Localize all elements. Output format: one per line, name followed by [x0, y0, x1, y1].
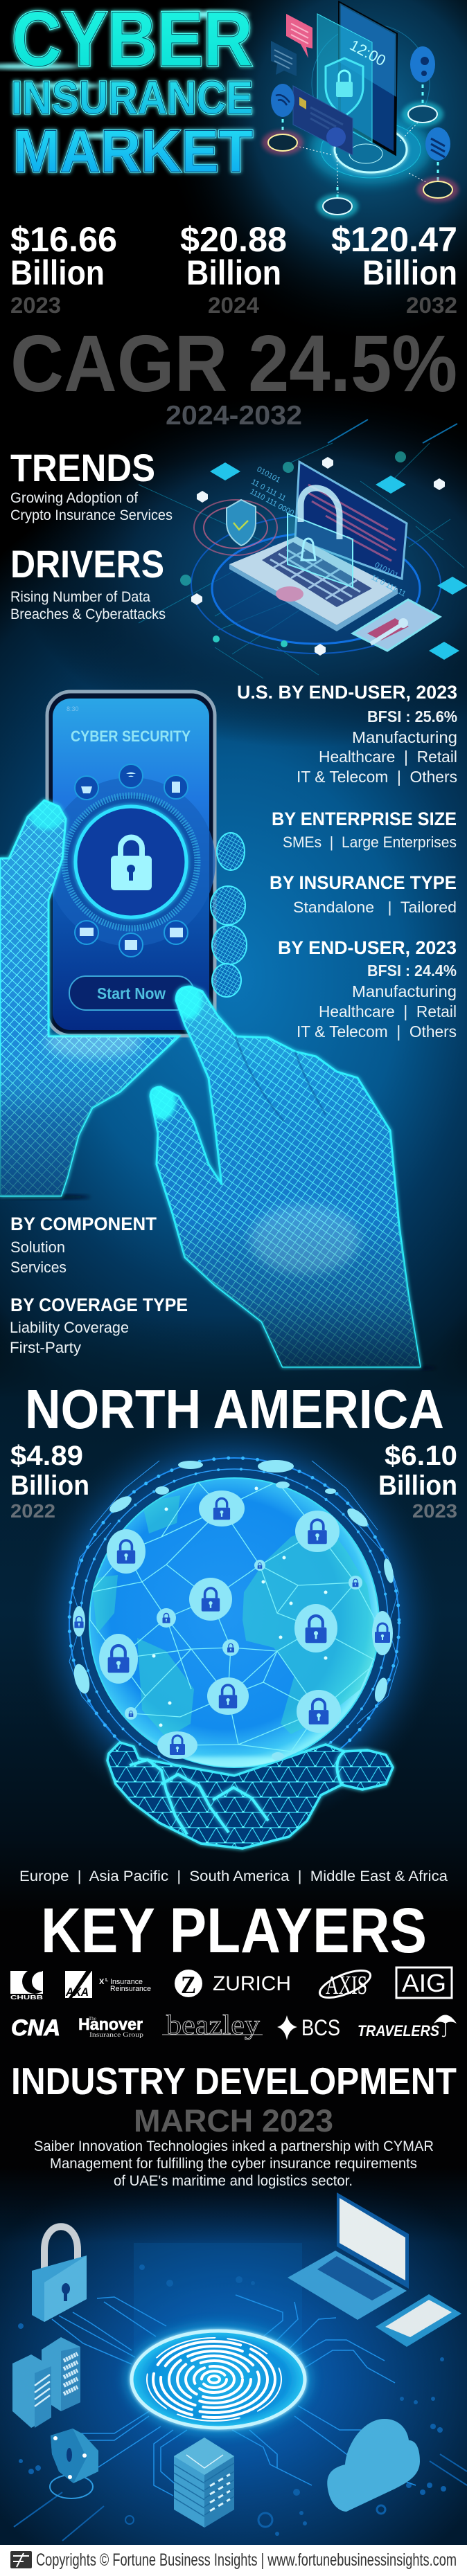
stat: 2024: 2024 [208, 293, 259, 318]
segment: end-user: Healthcare | Retail [319, 1002, 457, 1020]
segment: insurance type [270, 872, 457, 916]
stat: 2023: Billion [10, 253, 105, 292]
logo: Axis: AXIS [326, 1971, 367, 2000]
title: INSURANCE [11, 72, 253, 124]
segment: U.S. by end-user: BFSI : 25.6% [367, 708, 457, 726]
logo: Axis [317, 1965, 373, 2003]
stat: North America 2022: Billion [10, 1470, 89, 1501]
segment: enterprise size [272, 809, 457, 851]
segment: coverage type: Liability Coverage [10, 1319, 129, 1336]
segment: insurance type: BY INSURANCE TYPE [270, 872, 457, 893]
segment: U.S. by end-user: Manufacturing [352, 728, 457, 746]
title [0, 0, 253, 185]
stat: 2032: $120.47 [331, 220, 457, 259]
stat: 2023: $16.66 [10, 220, 117, 259]
title: MARKET [13, 118, 253, 185]
segment: U.S. by end-user: U.S. BY END-USER, 2023 [237, 682, 457, 703]
illustration: laptop with padlock: 11 0 111 11 [250, 478, 288, 503]
logo: AXA XL [65, 1970, 151, 1999]
stat: 2024: Billion [186, 253, 281, 292]
fingerprint disc [125, 2324, 312, 2435]
segment: end-user: BFSI : 24.4% [367, 962, 457, 980]
icon: laptop and phone [288, 2192, 461, 2347]
stat: 2032: Billion [362, 253, 457, 292]
illustration: smartphone: 8:30 [67, 705, 79, 712]
segment: component: Solution [10, 1239, 65, 1256]
illustration: globe with padlocks [69, 1458, 399, 1848]
logo: CNA: CNA [11, 2015, 60, 2040]
logo: Hanover: The [89, 2016, 96, 2021]
segment: enterprise size: SMEs | Large Enterprises [283, 834, 457, 851]
title: MARKET [13, 118, 253, 185]
trends: Growing Adoption of [10, 490, 138, 506]
other regions: Europe | Asia Pacific | South America | Middle East & Africa [19, 1868, 448, 1884]
segment: U.S. by end-user: IT & Telecom | Others [297, 768, 457, 786]
stat: 2032 [331, 220, 457, 318]
stat: North America 2023 [378, 1441, 457, 1522]
phone heading: CYBER SECURITY [71, 728, 191, 745]
illustration: laptop with padlock: 010101 [256, 465, 282, 485]
logo: Hanover: Insurance Group [89, 2031, 144, 2038]
illustration: laptop with padlock: 1110 111 0000 [249, 487, 295, 518]
trends: Crypto Insurance Services [10, 507, 173, 523]
polygon hand [107, 1742, 393, 1848]
segment: coverage type: BY COVERAGE TYPE [10, 1295, 188, 1315]
start now button: Start Now [97, 984, 166, 1002]
illustration: left wireframe hand [0, 797, 247, 1199]
stat: North America 2023: $6.10 [385, 1441, 457, 1471]
logo: BCS: BCS [301, 2015, 340, 2040]
segment: insurance type: Standalone | Tailored [293, 899, 457, 916]
stat: North America 2022: $4.89 [10, 1441, 83, 1471]
stat: North America 2022 [10, 1441, 89, 1522]
trends [10, 446, 173, 523]
logo: AIG: AIG [402, 1969, 446, 1997]
illustration: laptop with padlock: 11 0 111 11 [370, 573, 407, 598]
icon: cloud [327, 2419, 420, 2512]
segment: coverage type [10, 1295, 188, 1356]
logo: Zurich: ZURICH [213, 1972, 291, 1995]
logo: Chubb [10, 1971, 43, 1999]
logo: AXA XL: Insurance [110, 1978, 143, 1986]
key player logos [10, 1965, 457, 2040]
logo: BCS [277, 2015, 340, 2040]
padlock badges [71, 1460, 396, 1760]
logo: Travelers: TRAVELERS [358, 2022, 439, 2039]
icon: padlock [111, 838, 152, 890]
logo: AXA XL: Reinsurance [110, 1985, 151, 1993]
stat: North America 2023: 2023 [412, 1500, 457, 1522]
icon: server stack [174, 2438, 234, 2528]
drivers: DRIVERS [10, 542, 164, 586]
segment: component [10, 1214, 157, 1276]
logo: Chubb: CHUBB [10, 1994, 43, 2001]
illustration: smartphone [46, 692, 215, 1036]
stat: North America 2023: Billion [378, 1470, 457, 1501]
start now button [69, 976, 194, 1010]
segment: coverage type: First-Party [10, 1339, 81, 1356]
illustration: smartphone with shield: 12:00 [347, 36, 389, 69]
logo: Zurich: Z [181, 1971, 196, 1999]
segment: component: BY COMPONENT [10, 1214, 157, 1234]
segment: end-user: IT & Telecom | Others [297, 1023, 457, 1041]
circuit traces [52, 2295, 416, 2496]
icon: shield [50, 2429, 98, 2498]
icon: Fortune Business Insights logo [10, 2551, 32, 2568]
stat: 2023 [10, 220, 117, 318]
illustration: laptop with padlock: 010101 [373, 561, 400, 580]
app icons [75, 764, 188, 957]
stat: 2032: 2032 [406, 293, 457, 318]
segment: end-user: Manufacturing [352, 982, 457, 1000]
icon: server towers [12, 2337, 80, 2428]
development description [34, 2138, 434, 2189]
title: INSURANCE [11, 72, 253, 124]
logo: Hanover: Hanover [78, 2015, 143, 2034]
development description: of UAE's maritime and logistics sector. [114, 2173, 353, 2189]
development description: Management for fulfilling the cyber insurance requirements [50, 2156, 417, 2172]
logo: AXA XL: X [99, 1978, 105, 1986]
logo: AXA XL: AXA [65, 1985, 89, 1999]
drivers [10, 542, 166, 622]
logo: Zurich [175, 1970, 291, 1999]
trends: TRENDS [10, 446, 155, 489]
logo: Beazley: beazley [166, 2009, 260, 2040]
stat: 2024: $20.88 [180, 220, 287, 259]
CAGR headline: 2024-2032 [166, 401, 302, 431]
illustration: laptop with padlock [139, 443, 467, 678]
illustration: cyber security network [12, 2192, 467, 2541]
stat: North America 2022: 2022 [10, 1500, 55, 1522]
segment: enterprise size: BY ENTERPRISE SIZE [272, 809, 457, 829]
segment: end-user [278, 937, 457, 1041]
logo: AXA XL: L [105, 1978, 109, 1983]
illustration: smartphone with shield [262, 3, 459, 219]
stat: 2023: 2023 [10, 293, 61, 318]
development description: Saiber Innovation Technologies inked a partnership with CYMAR [34, 2138, 434, 2154]
development date: MARCH 2023 [134, 2103, 333, 2138]
drivers: Rising Number of Data [10, 589, 150, 605]
segment: U.S. by end-user [237, 682, 457, 786]
illustration: right wireframe hand [148, 981, 437, 1370]
drivers: Breaches & Cyberattacks [10, 606, 166, 622]
segment: U.S. by end-user: Healthcare | Retail [319, 748, 457, 766]
segment: component: Services [10, 1259, 67, 1276]
icon: padlock [32, 2226, 87, 2322]
stat: 2024 [180, 220, 287, 318]
segment: end-user: BY END-USER, 2023 [278, 937, 457, 958]
logo: Travelers [358, 2015, 457, 2039]
footer [0, 2545, 467, 2576]
